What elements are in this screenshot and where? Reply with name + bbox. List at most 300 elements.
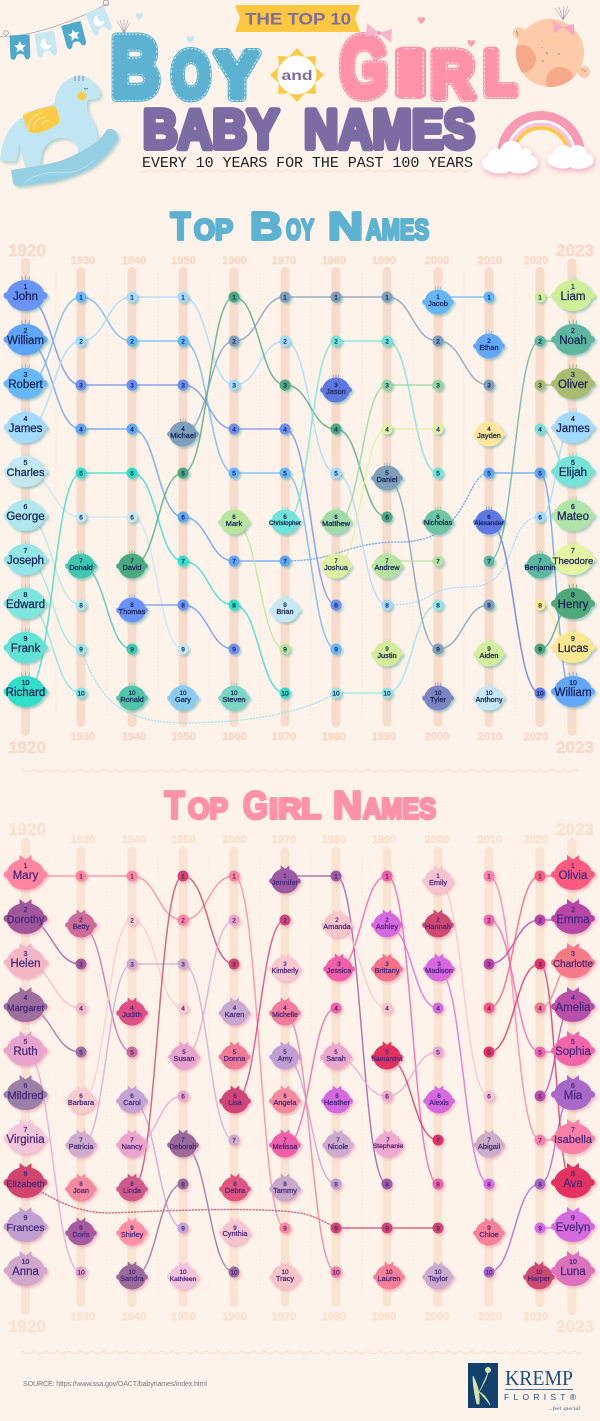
head: Matthew: Matthew [322, 519, 351, 528]
head: Amelia: 4 [571, 995, 575, 1002]
rank dots 1980: 9 [334, 1225, 338, 1232]
head: Lisa: Lisa [228, 1098, 243, 1107]
head: Sandra: 10 [128, 1269, 136, 1276]
rank dots 1940: 1 [130, 294, 134, 301]
head: Melissa: 7 [283, 1137, 287, 1144]
rank dots 2020: 6 [538, 1093, 542, 1100]
head: Lauren [373, 1261, 405, 1289]
rank dots 1970 [280, 914, 290, 1234]
head: Carol [116, 1085, 148, 1113]
head: Oliver: 3 [571, 372, 575, 379]
title word: Boy: O [172, 39, 210, 111]
head: Doris: 9 [79, 1225, 83, 1232]
rank dots 2010 [484, 870, 494, 1278]
rank dots 1930: 10 [77, 690, 85, 697]
head: Heather [321, 1085, 353, 1113]
head: Shirley [116, 1217, 148, 1245]
rank dots 1990: 10 [383, 690, 391, 697]
head: Liam: 1 [571, 284, 575, 291]
scallop under subtitle [142, 168, 471, 174]
head: Sarah [320, 1041, 352, 1069]
year labels: girls: 1970 [272, 1311, 296, 1323]
head: Brittany [371, 953, 403, 981]
rank dots 2000: 3 [436, 382, 440, 389]
head: John: John [13, 291, 38, 303]
head: Margaret [4, 987, 48, 1022]
rank dots 1950 [178, 292, 188, 654]
year labels: girls: 2020 [524, 834, 548, 846]
head: Taylor: 10 [434, 1269, 442, 1276]
year labels: boys: 1970 [272, 255, 296, 267]
year labels: boys: 1990 [372, 255, 396, 267]
rank dots 1960: 5 [232, 470, 236, 477]
head: Thomas: Thomas [119, 607, 146, 616]
heart decoration [136, 13, 194, 43]
head: Harper: 10 [535, 1269, 543, 1276]
rank dots 1940: 5 [130, 470, 134, 477]
head: Debra [219, 1173, 251, 1201]
head: Alexander: Alexander [474, 520, 504, 527]
head: Angela: Angela [273, 1098, 297, 1107]
banner: the top 10 [235, 5, 360, 32]
column 1950 boys [167, 292, 199, 710]
title word: Girl: I [396, 39, 424, 107]
head: Anthony: Anthony [475, 695, 503, 704]
banner: the top 10: THE TOP 10 [245, 10, 351, 28]
rank dots 1930: 3 [79, 961, 83, 968]
timeline bars: girls [21, 838, 576, 1315]
head: Andrew: 7 [385, 558, 389, 565]
column 1940 girls [116, 870, 148, 1289]
title word: Boy: O [172, 39, 210, 111]
head: Amanda: Amanda [323, 922, 352, 931]
rank dots 1960: 10 [230, 1269, 238, 1276]
head: Tracy: 10 [281, 1269, 289, 1276]
head: Joshua: 7 [334, 558, 338, 565]
head: Amy: 5 [283, 1049, 287, 1056]
head: Carol: 6 [130, 1093, 134, 1100]
rank dots 1980: 10 [332, 1269, 340, 1276]
rank dots 2000: 8 [436, 602, 440, 609]
head: Tracy: Tracy [276, 1274, 294, 1283]
head: Donna: Donna [224, 1054, 246, 1063]
year labels: boys: 1920 [8, 738, 46, 757]
rank dots 2010: 3 [487, 961, 491, 968]
rank dots 1960: 2 [232, 338, 236, 345]
rank dots 1950: 6 [181, 514, 185, 521]
head: Liam [551, 276, 595, 311]
head: Samantha: 5 [385, 1049, 389, 1056]
head: Barbara [65, 1085, 97, 1113]
head: Luna: Luna [560, 1266, 586, 1278]
head: Tyler [422, 682, 454, 710]
head: Doris: Doris [72, 1230, 90, 1239]
rank dots 1930: 1 [79, 294, 83, 301]
title word: Girl: R [431, 38, 474, 111]
head: Noah: 2 [571, 328, 575, 335]
rank dots 1970: 9 [283, 646, 287, 653]
column 2020 boys [524, 292, 556, 698]
head: Luna: 10 [569, 1259, 577, 1266]
head: Mateo: 6 [571, 504, 575, 511]
heading: top girl names: N [333, 784, 362, 828]
head: Charlotte [551, 943, 595, 978]
rank dots 2020: 8 [538, 602, 542, 609]
head: Michelle [269, 997, 301, 1025]
rank dots 1950: 8 [181, 602, 185, 609]
head: Susan: Susan [174, 1054, 194, 1063]
head: Nancy: Nancy [122, 1142, 143, 1151]
head: Dorothy: Dorothy [7, 914, 45, 926]
head: Stephanie: 7 [386, 1137, 390, 1144]
head: Karen: 4 [233, 1005, 237, 1012]
title word: Girl: L [484, 39, 516, 107]
head: Cynthia [219, 1217, 251, 1245]
head: Oliver [551, 364, 595, 399]
head: Samantha [371, 1041, 403, 1069]
head: Michael: Michael [170, 431, 196, 440]
head: Elijah [551, 452, 595, 487]
head: Lauren: 10 [385, 1269, 393, 1276]
rank dots 1950: 7 [181, 558, 185, 565]
head: Sophia [551, 1031, 595, 1066]
column 1920 boys [4, 276, 48, 707]
head: Charles [4, 452, 48, 487]
rank dots 1980 [330, 870, 342, 1278]
year labels: boys: 1960 [222, 731, 247, 743]
title word: Girl: I [396, 39, 424, 107]
head: Amanda [321, 909, 353, 937]
head: Isabella: Isabella [554, 1134, 593, 1146]
head: Jayden: Jayden [477, 431, 501, 440]
head: Chloe: 9 [487, 1225, 491, 1232]
head: Joseph: Joseph [7, 555, 44, 567]
head: Linda: Linda [123, 1186, 142, 1195]
rank dots 1940: 4 [130, 426, 134, 433]
head: Dorothy [4, 899, 48, 934]
head: Nicholas: Nicholas [424, 518, 452, 527]
column 2000 girls [422, 865, 455, 1289]
head: Ethan: Ethan [479, 343, 499, 352]
head: Amelia [551, 987, 595, 1022]
head: Karen [219, 997, 250, 1025]
head: Emma [551, 899, 595, 934]
head: James: James [556, 423, 590, 435]
head: Frances [4, 1207, 48, 1242]
year labels: boys: 1950 [171, 255, 196, 267]
head: Ashley [371, 909, 403, 937]
heading: top girl names: OP [188, 794, 228, 826]
head: Kimberly: Kimberly [272, 968, 299, 975]
head: Daniel: 5 [385, 470, 389, 477]
heading: top boy names [170, 206, 429, 248]
head: Karen: Karen [225, 1010, 244, 1019]
head: Sarah: 5 [334, 1049, 338, 1056]
heading: top boy names: OY [286, 214, 314, 246]
head: Andrew [371, 550, 403, 578]
head: Jessica: Jessica [327, 966, 352, 975]
head: Jacob [422, 286, 454, 314]
rank dots 1950: 1 [181, 873, 185, 880]
rank dots 1930: 5 [79, 1049, 83, 1056]
head: David: David [123, 563, 141, 572]
title word: Girl: R [431, 38, 474, 111]
column 1920 girls [4, 855, 48, 1286]
head: Susan: 5 [182, 1049, 186, 1056]
year labels: girls: 2010 [478, 834, 502, 846]
year labels: boys: 1970 [272, 731, 296, 743]
head: Cynthia: Cynthia [222, 1229, 248, 1238]
head: Shirley: Shirley [121, 1230, 144, 1239]
head: Barbara: Barbara [68, 1098, 95, 1107]
rank dots 1940: 3 [130, 961, 134, 968]
rank dots 1950: 6 [181, 1093, 185, 1100]
head: Amanda: 2 [335, 917, 339, 924]
head: Michael [167, 418, 199, 446]
rank dots 1930: 8 [79, 602, 83, 609]
rank dots 1940: 2 [130, 338, 134, 345]
head: Joshua: Joshua [324, 563, 349, 572]
head: Patricia [65, 1129, 97, 1157]
head: Helen: 3 [24, 951, 28, 958]
rank dots 1970: 3 [283, 382, 287, 389]
head: Cynthia: 9 [233, 1225, 237, 1232]
rank dots 2020: 8 [538, 1181, 542, 1188]
rank dots 2020: 3 [538, 961, 542, 968]
heading: top boy names: AMES [366, 214, 429, 246]
rank dots 1980 [330, 292, 342, 698]
head: Michelle: Michelle [272, 1012, 298, 1019]
rank dots 2020: 2 [538, 338, 542, 345]
head: Aiden: 9 [487, 646, 491, 653]
head: Margaret: 4 [24, 995, 28, 1002]
title word: Boy: Y [216, 39, 258, 111]
rank dots 1960: 4 [232, 426, 236, 433]
head: James: 4 [571, 416, 575, 423]
head: Joshua [320, 550, 352, 578]
title word: Boy: O [172, 39, 210, 111]
year labels: girls: 2000 [425, 1311, 449, 1323]
column 2023 girls [551, 855, 595, 1286]
rank dots 1970 [280, 292, 290, 698]
head: Thomas: 8 [130, 602, 134, 609]
head: Emily [422, 865, 454, 893]
head: Nicole [322, 1129, 354, 1157]
head: Joan [65, 1173, 97, 1201]
head: Henry: 8 [571, 592, 575, 599]
column 2020 girls [523, 870, 555, 1289]
title word: Girl: G [340, 20, 388, 114]
head: Deborah: Deborah [170, 1144, 197, 1151]
head: Donald [65, 550, 97, 578]
rank dots 1930: 3 [79, 382, 83, 389]
head: William [4, 320, 48, 355]
head: Charlotte: Charlotte [553, 959, 594, 970]
head: Luna [551, 1251, 595, 1286]
head: Daniel: Daniel [377, 475, 398, 484]
head: Amy [269, 1041, 301, 1069]
rank dots 2010: 8 [487, 602, 491, 609]
year labels: girls: 1980 [322, 834, 346, 846]
column 1990 girls [371, 870, 405, 1289]
year labels: girls [8, 820, 594, 1336]
head: Carol: Carol [123, 1098, 141, 1107]
head: Heather: Heather [324, 1098, 351, 1107]
head: Frank: Frank [11, 643, 40, 655]
head: Brian: 8 [283, 602, 287, 609]
head: Joseph [4, 540, 48, 575]
rank dots 1980: 8 [334, 602, 338, 609]
rank dots 1970: 2 [283, 917, 287, 924]
column 1980 girls [320, 870, 355, 1278]
year labels: girls: 1960 [222, 1311, 247, 1323]
year labels: girls: 2020 [524, 1311, 548, 1323]
head: David: 7 [130, 558, 134, 565]
divider scallop [22, 768, 578, 774]
rank dots 1980: 8 [334, 1181, 338, 1188]
head: Margaret: Margaret [7, 1003, 45, 1013]
head: Mia: 6 [571, 1083, 575, 1090]
head: Ronald: Ronald [120, 695, 144, 704]
head: Kimberly [269, 953, 301, 981]
logo: Kremp Florist: ...feel special [548, 1405, 580, 1412]
rank dots 1940: 9 [130, 646, 134, 653]
head: Aiden: Aiden [480, 651, 498, 660]
head: Lucas: Lucas [558, 643, 589, 655]
rank dots 2000: 9 [436, 646, 440, 653]
head: Jennifer: 1 [283, 873, 287, 880]
head: Justin [371, 638, 403, 666]
head: Benjamin: 7 [538, 558, 542, 565]
head: Betty: 2 [79, 917, 83, 924]
heading: top boy names: T [170, 206, 191, 248]
rank dots 2020: 1 [538, 294, 542, 301]
head: John [4, 276, 48, 311]
head: Heather: 6 [335, 1093, 339, 1100]
head: Evelyn: 9 [571, 1215, 575, 1222]
rank dots 2010: 3 [487, 382, 491, 389]
year labels: boys: 2010 [478, 255, 502, 267]
head: Frances: Frances [7, 1222, 44, 1234]
rank dots 1990: 8 [385, 602, 389, 609]
rank dots 1990: 1 [385, 873, 389, 880]
head: Charlotte: 3 [571, 951, 575, 958]
head: Brian: Brian [276, 607, 294, 616]
head: William: William [554, 687, 592, 699]
title word: Girl: G [340, 20, 388, 114]
head: Mildred: Mildred [7, 1090, 44, 1102]
year labels: girls: 1930 [71, 1311, 95, 1323]
head: Sophia: Sophia [555, 1046, 592, 1058]
head: James [551, 408, 595, 443]
rank dots 2010: 5 [487, 470, 491, 477]
rank dots 1940 [126, 870, 138, 1058]
rank dots 1950: 9 [181, 1225, 185, 1232]
year labels: boys: 1930 [71, 731, 95, 743]
head: Nicole: Nicole [328, 1142, 348, 1151]
head: Virginia [4, 1119, 48, 1154]
head: Patricia: 7 [79, 1137, 83, 1144]
head: Anna: 10 [22, 1259, 29, 1266]
rank dots 2010: 7 [487, 558, 491, 565]
head: Michael: 4 [181, 426, 185, 433]
year labels: girls: 2023 [556, 1317, 594, 1336]
rank dots 1980: 4 [334, 1005, 338, 1012]
year labels: girls: 2023 [556, 820, 594, 839]
head: Nicholas: 6 [436, 514, 440, 521]
head: Emily: Emily [429, 878, 447, 887]
year labels: boys: 2000 [425, 731, 449, 743]
rank dots 2010: 1 [487, 294, 491, 301]
year labels: boys: 1930 [71, 255, 95, 267]
rank dots 1930: 1 [79, 873, 83, 880]
rank dots 1940: 5 [130, 1049, 134, 1056]
head: Donna [219, 1041, 250, 1069]
rank dots 2010: 8 [487, 1181, 491, 1188]
head: Helen [4, 943, 48, 978]
head: Aiden [473, 638, 505, 666]
rank dots 1970: 7 [283, 558, 287, 565]
head: Henry: Henry [558, 599, 589, 611]
head: James: 4 [24, 416, 28, 423]
head: Ruth: Ruth [13, 1046, 38, 1058]
head: Melissa [269, 1129, 301, 1157]
connecting lines: boys [26, 297, 572, 723]
column 2010 boys [473, 292, 505, 710]
rank dots 2000: 8 [436, 1181, 440, 1188]
rank dots 1990 [382, 870, 392, 1234]
head: Henry [551, 584, 595, 619]
year labels: boys: 1950 [171, 731, 196, 743]
head: Isabella: 7 [571, 1127, 575, 1134]
head: Abigail [473, 1129, 505, 1157]
rank dots 2000: 9 [436, 1225, 440, 1232]
rank dots 1960 [228, 292, 240, 654]
logo: Kremp Florist: KREMP [505, 1366, 573, 1390]
head: Nancy: 7 [130, 1137, 134, 1144]
head: Madison [423, 953, 455, 981]
rank dots 2020: 2 [538, 917, 542, 924]
head: Frank: 9 [24, 636, 28, 643]
head: Lucas [551, 628, 595, 663]
head: Kimberly: 3 [283, 961, 287, 968]
rank dots 2020 [534, 292, 546, 698]
head: Dorothy: 2 [24, 907, 28, 914]
head: Angela: 6 [283, 1093, 287, 1100]
rank dots 1990: 2 [385, 338, 389, 345]
head: Debra: Debra [225, 1186, 246, 1195]
head: Ruth: 5 [24, 1039, 28, 1046]
head: Joseph: 7 [24, 548, 28, 555]
heading: top girl names: AMES [363, 794, 436, 826]
heading: top girl names [164, 784, 436, 828]
head: Sarah: Sarah [326, 1054, 346, 1063]
rank dots 1930 [76, 870, 86, 1278]
head: Virginia: 7 [24, 1127, 28, 1134]
rank dots 1930: 4 [79, 1005, 83, 1012]
rank dots 1950: 9 [181, 646, 185, 653]
head: Virginia: Virginia [6, 1134, 45, 1146]
year labels: girls: 1920 [8, 1317, 46, 1336]
title: baby names: BABY [143, 98, 279, 160]
rank dots 1930: 6 [79, 514, 83, 521]
head: Alexander: 6 [487, 514, 491, 521]
head: Linda: 8 [130, 1181, 134, 1188]
rank dots 1950: 2 [181, 917, 185, 924]
rank dots 1990: 1 [385, 294, 389, 301]
head: Brittany: Brittany [374, 966, 400, 975]
year labels: girls: 1990 [372, 1311, 396, 1323]
